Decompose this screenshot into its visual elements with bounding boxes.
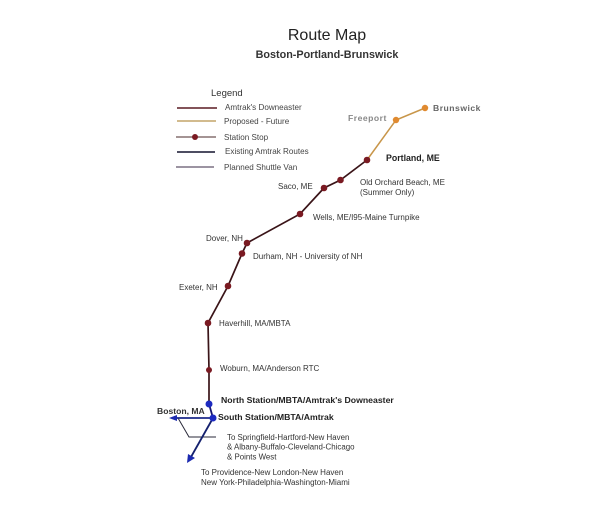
arrow: west to Boston, MA [169,415,213,421]
legend heading: Legend [211,88,243,99]
label: To Springfield: & Points West [227,452,277,462]
label: Old Orchard Beach, ME: (Summer Only) [360,188,415,197]
existing route: north to south station [209,404,213,418]
station: North Station [206,400,212,408]
label: North Station: North Station/MBTA/Amtrak's Downeaster [221,395,394,405]
label: Freeport: Freeport [348,113,387,123]
label: Boston, MA: Boston, MA [157,406,205,416]
arrow: southwest to Providence [187,418,213,463]
label: Saco, ME: Saco, ME [278,182,313,191]
label: Dover, NH: Dover, NH [206,234,243,243]
label: To Springfield: To Springfield-Hartford-New Haven [227,433,349,442]
label: To Springfield: & Albany-Buffalo-Cleveland-Chicago [227,442,355,452]
label: To Providence: New York-Philadelphia-Washington-Miami [201,478,350,487]
legend item: Amtrak's Downeaster: Amtrak's Downeaster [225,103,302,112]
legend item: Existing Amtrak Routes: Existing Amtrak Routes [225,147,309,156]
station: Freeport [393,117,399,123]
label: Durham, NH: Durham, NH - University of NH [253,252,363,261]
station: Brunswick [422,105,428,111]
station stops [205,157,370,373]
label: To Providence: To Providence-New London-New Haven [201,468,343,477]
label: Portland, ME: Portland, ME [386,153,440,163]
legend item: Proposed - Future: Proposed - Future [224,117,290,126]
label: Woburn, MA/Anderson RTC: Woburn, MA/Anderson RTC [220,364,320,373]
legend item: Planned Shuttle Van: Planned Shuttle Van [224,163,297,172]
shuttle van line [178,418,216,437]
proposed future route [367,105,428,160]
label: Exeter, NH: Exeter, NH [179,283,218,292]
label: Brunswick: Brunswick [433,103,481,113]
legend [176,88,309,172]
label: Old Orchard Beach, ME: Old Orchard Beach, ME [360,178,445,187]
title: Route Map [288,27,366,44]
legend item: Station Stop: Station Stop [224,133,269,142]
label: South Station: South Station/MBTA/Amtrak [218,412,334,422]
subtitle: Boston-Portland-Brunswick [256,49,399,61]
Downeaster route line [208,160,367,404]
station: South Station [210,414,216,422]
label: Wells, ME: Wells, ME/I95-Maine Turnpike [313,213,420,222]
label: Haverhill, MA/MBTA: Haverhill, MA/MBTA [219,319,291,328]
